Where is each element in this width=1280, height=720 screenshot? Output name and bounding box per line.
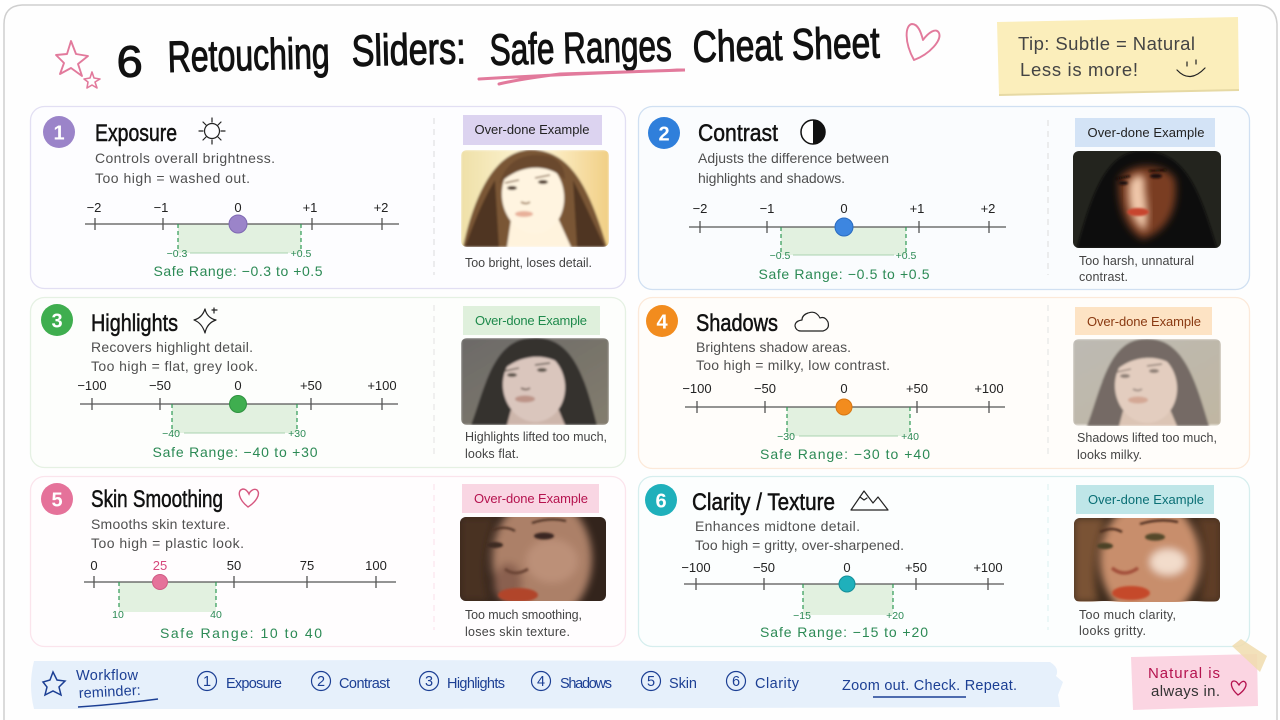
slider: +30	[288, 428, 306, 440]
slider	[681, 560, 1004, 640]
step 3: Highlights	[447, 676, 505, 692]
description	[95, 150, 275, 186]
tag: Over-done Example	[1088, 125, 1204, 140]
badge 3	[41, 304, 73, 336]
caption: looks milky.	[1077, 448, 1142, 462]
tag: Over-done Example	[474, 491, 588, 506]
description: highlights and shadows.	[698, 170, 845, 186]
icon: half circle	[801, 120, 825, 144]
description: Adjusts the difference between	[698, 150, 889, 166]
caption: looks gritty.	[1079, 624, 1146, 638]
slider: 25	[153, 558, 167, 573]
step 6	[726, 672, 800, 692]
title: Retouching	[167, 29, 330, 82]
tag: Over-done Example	[474, 122, 590, 137]
slider: −50	[753, 560, 775, 575]
panel: skin smoothing	[30, 476, 626, 646]
slider: Safe Range: −0.5 to +0.5	[758, 266, 930, 282]
panel: shadows	[638, 298, 1250, 468]
panel: exposure	[30, 106, 626, 288]
description	[698, 150, 889, 186]
panel: clarity	[638, 476, 1250, 646]
slider: 100	[365, 558, 387, 573]
slider: +40	[901, 431, 919, 443]
slider	[77, 378, 398, 460]
step 1	[198, 672, 282, 692]
badge 6	[645, 484, 677, 516]
pink note: always in.	[1151, 683, 1220, 700]
slider: +50	[905, 560, 927, 575]
slider: +100	[973, 560, 1003, 575]
slider: +50	[906, 381, 928, 396]
caption	[1079, 254, 1194, 284]
step 3	[420, 672, 505, 692]
step 2: 2	[317, 674, 325, 690]
zoom out reminder: Zoom out. Check. Repeat.	[842, 678, 1017, 694]
slider: +50	[300, 378, 322, 393]
photo: over-smoothed portrait	[460, 517, 606, 601]
panel: highlights	[30, 298, 626, 468]
caption: looks flat.	[465, 447, 519, 461]
step 2: Contrast	[339, 676, 390, 692]
description	[91, 339, 258, 374]
tape	[1232, 639, 1267, 672]
tip note: Less is more!	[1020, 59, 1138, 80]
icon: mountains	[851, 491, 888, 510]
step 5	[642, 672, 697, 692]
slider: −0.3	[167, 248, 188, 260]
badge 4: 4	[656, 312, 668, 334]
slider: +0.5	[896, 250, 917, 262]
slider: Safe Range: −40 to +30	[152, 444, 318, 460]
badge 1	[43, 116, 75, 148]
photo: gritty portrait	[1074, 518, 1220, 602]
caption	[1077, 431, 1217, 462]
tag	[1075, 118, 1215, 147]
slider: 0	[840, 201, 848, 216]
badge 5	[41, 483, 73, 515]
slider: −1	[154, 200, 168, 215]
badge 3: 3	[51, 310, 63, 332]
description: Recovers highlight detail.	[91, 339, 253, 355]
step 4: Shadows	[560, 676, 612, 692]
slider: 0	[234, 378, 242, 393]
photo: milky portrait	[1073, 339, 1221, 427]
title: Cheat Sheet	[692, 18, 880, 72]
slider: +2	[981, 201, 995, 216]
slider	[689, 201, 1006, 282]
heading: Exposure	[95, 120, 177, 147]
title: Safe Ranges	[489, 22, 672, 75]
step 6: Clarity	[755, 676, 800, 692]
badge 5: 5	[51, 490, 63, 512]
tag	[463, 306, 600, 335]
heading: Clarity / Texture	[692, 489, 835, 516]
tag	[1075, 307, 1212, 335]
tip note: Tip: Subtle = Natural	[1018, 33, 1195, 54]
caption: Too bright, loses detail.	[465, 256, 592, 270]
slider: Safe Range: −30 to +40	[760, 446, 930, 462]
slider: Safe Range: −0.3 to +0.5	[154, 263, 323, 279]
tag: Over-done Example	[1087, 314, 1201, 329]
slider: 40	[210, 609, 222, 621]
title: Sliders:	[351, 24, 466, 76]
slider: +2	[374, 200, 388, 215]
badge 2	[648, 117, 680, 149]
caption: Too much clarity,	[1079, 608, 1176, 622]
label: reminder:	[78, 683, 141, 702]
description: Too high = flat, grey look.	[91, 358, 258, 374]
icon: heart	[239, 489, 258, 507]
step 5: 5	[647, 674, 655, 690]
caption	[1079, 608, 1176, 638]
caption: loses skin texture.	[465, 625, 570, 639]
step 1: Exposure	[226, 676, 282, 692]
slider: 10	[112, 609, 124, 621]
slider: −100	[77, 378, 107, 393]
heading: Contrast	[698, 120, 778, 147]
slider	[682, 381, 1005, 462]
icon: sun	[199, 118, 225, 144]
label: Workflow	[76, 668, 139, 684]
slider: −0.5	[770, 250, 791, 262]
icon: smiley	[1177, 60, 1205, 77]
step 2	[312, 672, 390, 692]
caption: Too harsh, unnatural	[1079, 254, 1194, 268]
slider: −100	[681, 560, 711, 575]
caption: Highlights lifted too much,	[465, 430, 607, 444]
photo: overexposed portrait	[461, 150, 609, 247]
label	[76, 668, 158, 707]
pink note	[1131, 639, 1267, 710]
tag	[463, 115, 602, 145]
slider: 0	[234, 200, 242, 215]
badge 6: 6	[655, 490, 667, 512]
step 6: 6	[732, 674, 740, 690]
description: Too high = washed out.	[95, 170, 250, 186]
description: Brightens shadow areas.	[696, 339, 851, 355]
photo: flat grey portrait	[461, 338, 609, 426]
tag	[1076, 485, 1214, 514]
slider: +1	[910, 201, 924, 216]
workflow reminder bar	[31, 660, 1063, 709]
description	[695, 518, 904, 553]
caption: Too much smoothing,	[465, 608, 582, 622]
heading: Skin Smoothing	[91, 486, 223, 513]
icon: cloud	[795, 312, 828, 331]
slider: −30	[777, 431, 795, 443]
slider: −2	[693, 201, 707, 216]
title	[116, 18, 880, 87]
badge 1: 1	[53, 122, 65, 144]
slider: −40	[162, 428, 180, 440]
slider: 0	[840, 381, 848, 396]
slider: +100	[974, 381, 1004, 396]
slider: −100	[682, 381, 712, 396]
slider: 0	[843, 560, 851, 575]
pink note: Natural is	[1148, 665, 1220, 682]
title: 6	[116, 37, 143, 87]
slider: +100	[367, 378, 397, 393]
slider: Safe Range: −15 to +20	[760, 624, 928, 640]
step 3: 3	[425, 674, 433, 690]
title underline	[479, 70, 685, 84]
icon: star	[43, 672, 65, 695]
slider	[84, 558, 396, 641]
slider: 50	[227, 558, 241, 573]
caption: contrast.	[1079, 270, 1128, 284]
description: Controls overall brightness.	[95, 150, 275, 166]
icon: sparkle	[194, 308, 217, 333]
slider: 0	[90, 558, 98, 573]
description: Enhances midtone detail.	[695, 518, 860, 534]
tag: Over-done Example	[1088, 492, 1204, 507]
step 1: 1	[203, 674, 211, 690]
step 5: Skin	[669, 676, 697, 692]
step 4	[532, 672, 612, 692]
slider: −1	[760, 201, 774, 216]
icon: small heart	[1231, 681, 1246, 695]
description: Too high = plastic look.	[91, 535, 244, 551]
description	[696, 339, 890, 373]
heading: Shadows	[696, 310, 778, 337]
step 4: 4	[537, 674, 545, 690]
panel: contrast	[638, 106, 1250, 290]
slider: Safe Range: 10 to 40	[160, 625, 322, 641]
caption	[465, 608, 582, 639]
description: Smooths skin texture.	[91, 516, 230, 532]
description: Too high = milky, low contrast.	[696, 357, 890, 373]
tag: Over-done Example	[475, 313, 587, 328]
slider: −2	[87, 200, 101, 215]
heading: Highlights	[91, 310, 178, 337]
caption: Shadows lifted too much,	[1077, 431, 1217, 445]
caption	[465, 430, 607, 461]
slider: +0.5	[291, 248, 312, 260]
icon: heart	[907, 24, 939, 60]
slider: +20	[886, 610, 904, 622]
tip note	[997, 17, 1239, 95]
description: Too high = gritty, over-sharpened.	[695, 537, 904, 553]
slider: −50	[754, 381, 776, 396]
slider: −50	[149, 378, 171, 393]
badge 4	[646, 305, 678, 337]
slider: 75	[300, 558, 314, 573]
icon: stars	[56, 41, 100, 88]
slider	[85, 200, 399, 279]
photo: high contrast portrait	[1073, 151, 1221, 248]
tag	[462, 484, 599, 513]
badge 2: 2	[658, 124, 670, 146]
slider: +1	[303, 200, 317, 215]
description	[91, 516, 244, 551]
slider: −15	[793, 610, 811, 622]
